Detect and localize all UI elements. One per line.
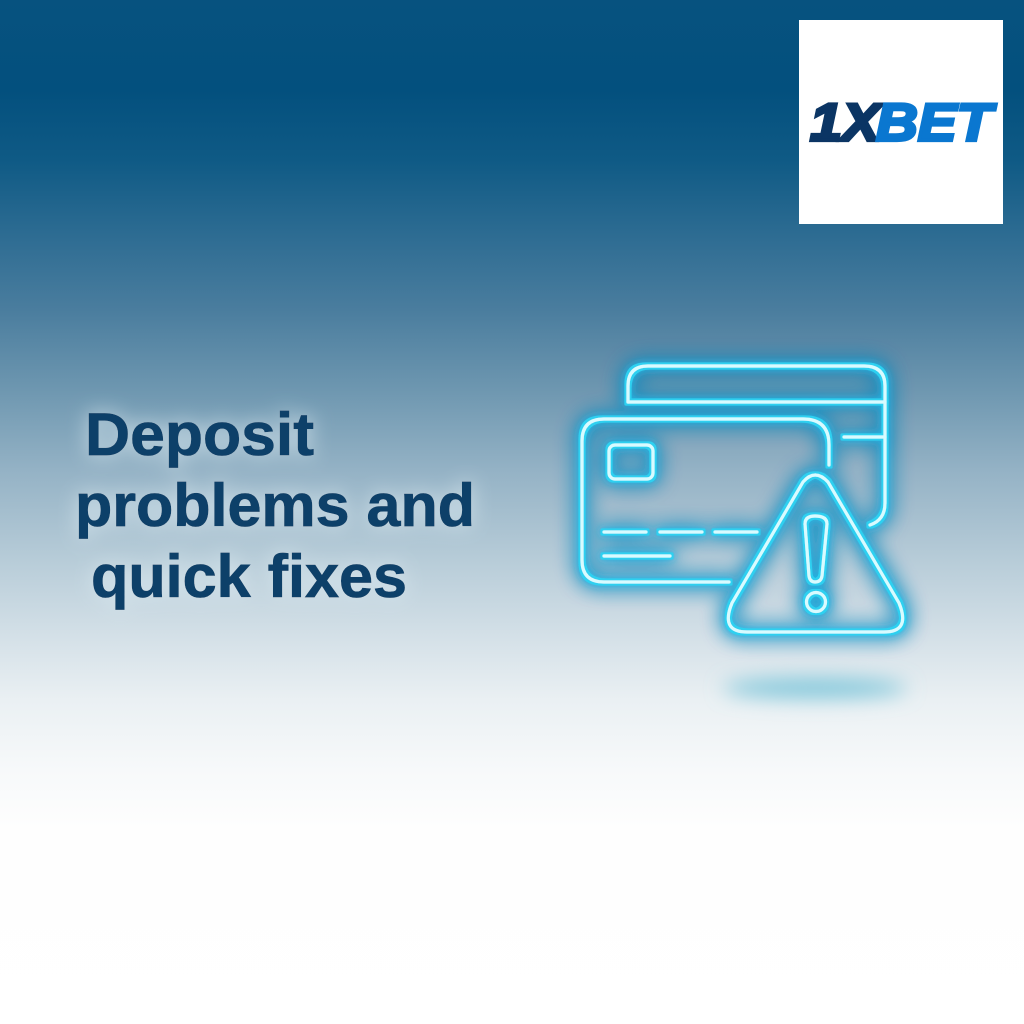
logo card (799, 20, 1003, 224)
warning triangle (728, 475, 903, 632)
card chip (609, 445, 653, 479)
title: Deposit (85, 401, 314, 468)
card number dashes (604, 530, 757, 534)
back card (628, 366, 885, 525)
title: problems and (75, 472, 475, 539)
neon icon: cards with warning (582, 366, 903, 632)
front card (582, 419, 829, 582)
title: quick fixes (91, 543, 407, 610)
card name line (604, 554, 670, 558)
icon shadow (723, 678, 907, 698)
logo: 1XBET: 1X (810, 94, 883, 152)
logo: 1XBET (810, 94, 997, 152)
exclamation mark (805, 516, 827, 582)
logo: 1XBET: BET (876, 94, 997, 152)
title (75, 401, 475, 610)
